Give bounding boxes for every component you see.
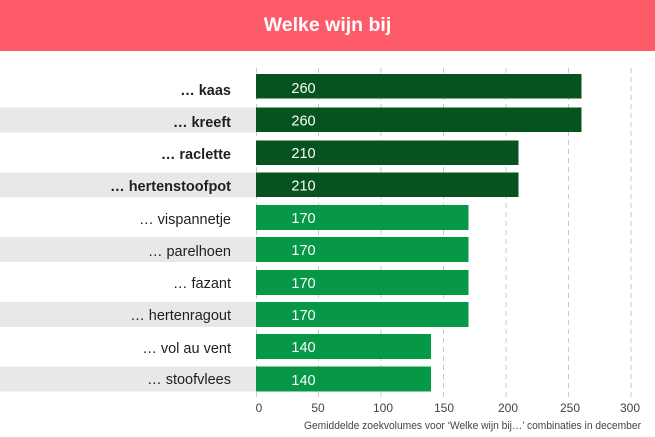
category labels: … hertenstoofpot [110,179,231,195]
category labels: … parelhoen [148,244,231,260]
x axis tick labels: 250 [560,401,580,415]
category labels: … vispannetje [139,212,231,228]
category labels: … kaas [180,83,231,99]
bar values: 260 [291,81,316,97]
x axis tick labels: 50 [311,401,325,415]
category labels: … kreeft [173,115,231,131]
category labels: … hertenragout [130,308,231,324]
category labels [110,83,231,388]
bar values: 140 [291,373,316,389]
bar values: 170 [291,276,316,292]
category labels: … fazant [173,276,231,292]
bar values: 170 [291,211,316,227]
bar values: 170 [291,308,316,324]
title banner: Welke wijn bij [264,14,391,36]
bar values: 210 [291,178,316,194]
x axis tick labels: 0 [256,401,263,415]
bar values: 140 [291,340,316,356]
category labels: … stoofvlees [147,372,231,388]
x axis tick labels [256,401,640,415]
category labels: … raclette [161,147,231,163]
title banner [0,0,655,51]
x axis tick labels: 100 [373,401,393,415]
category labels: … vol au vent [142,341,231,357]
bar values: 170 [291,243,316,259]
x axis tick labels: 300 [620,401,640,415]
x axis caption: Gemiddelde zoekvolumes voor ‘Welke wijn bij…’ combinaties in december [304,420,641,432]
bars: lower volume [256,205,468,392]
bar values [291,81,316,389]
bar values: 210 [291,146,316,162]
row background bands [0,108,256,392]
x axis tick labels: 150 [434,401,454,415]
bar values: 260 [291,114,316,130]
bar chart [256,74,582,392]
x axis tick labels: 200 [498,401,518,415]
bars: high volume [256,74,582,197]
